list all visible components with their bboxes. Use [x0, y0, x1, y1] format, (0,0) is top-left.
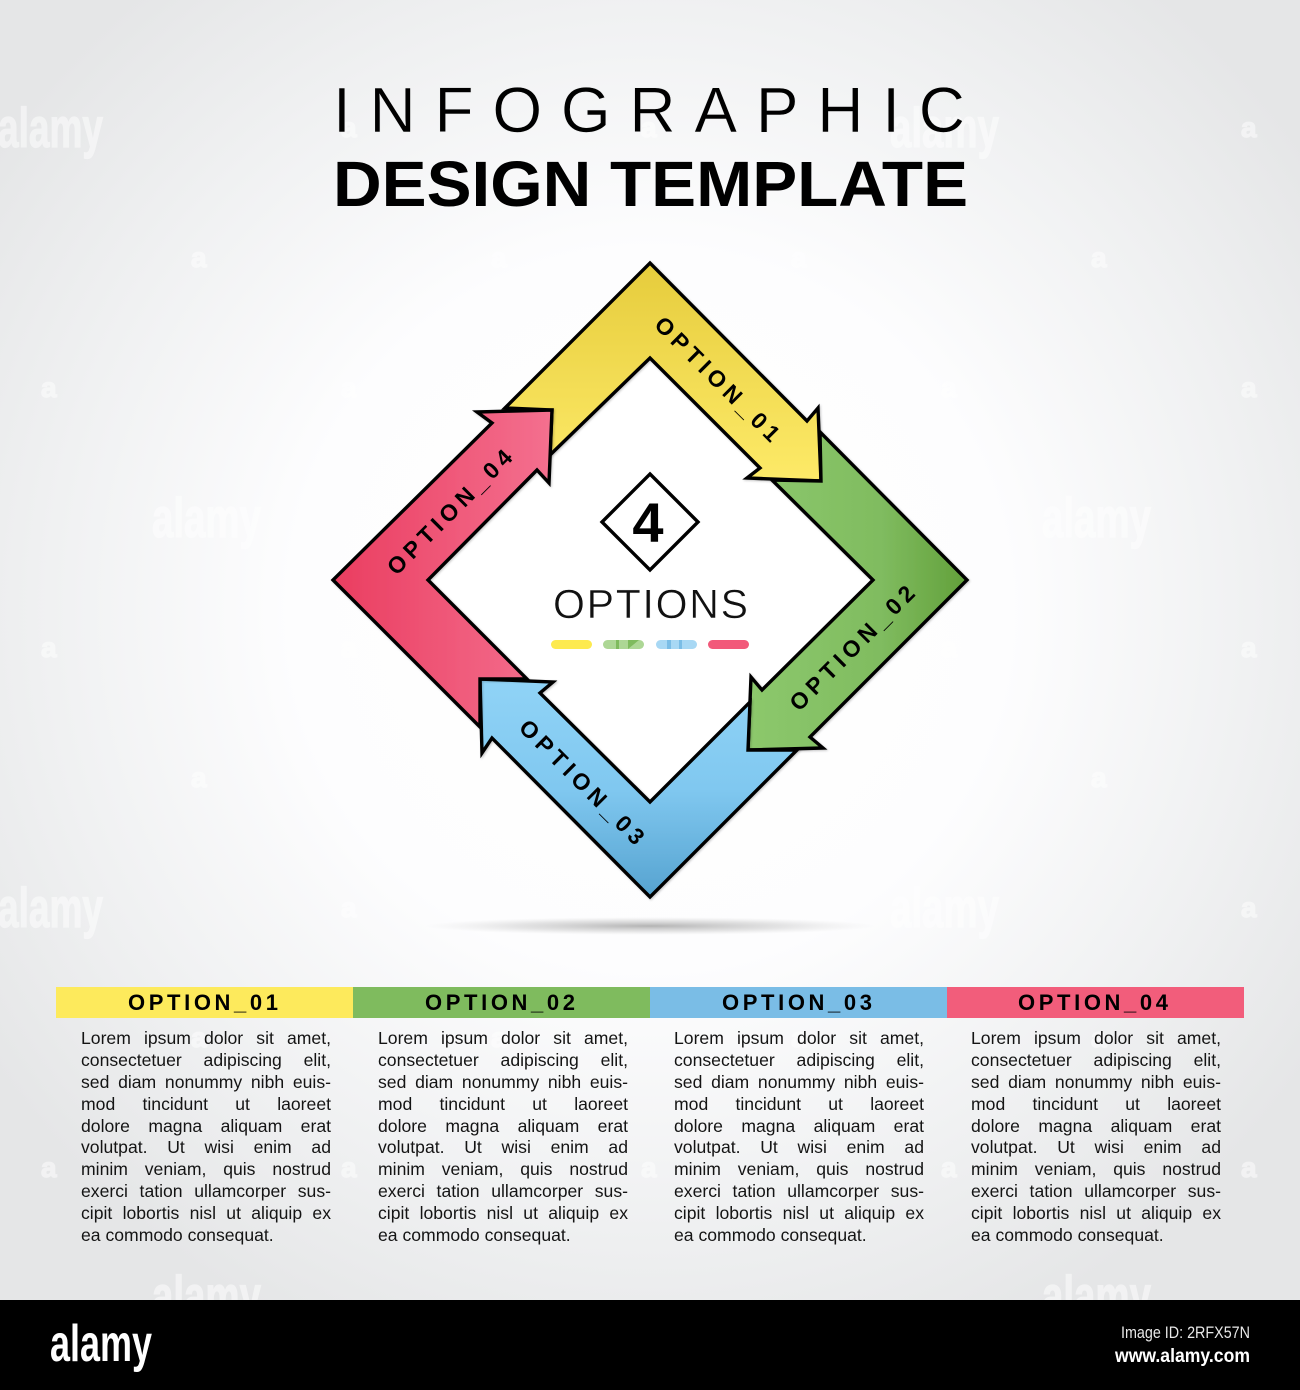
watermarks: a: [641, 112, 657, 143]
text block: option 04: dolore magna aliquam erat: [971, 1116, 1221, 1136]
footer logo: alamy: [50, 1315, 152, 1373]
centre badge: 4: 4: [632, 491, 664, 554]
watermarks: a: [1091, 762, 1107, 793]
text block: option 02: dolore magna aliquam erat: [378, 1116, 628, 1136]
text block: option 04: volutpat. Ut wisi enim ad: [971, 1137, 1221, 1157]
watermarks: a: [341, 112, 357, 143]
watermarks: a: [191, 1022, 207, 1053]
text block: option 01: consectetuer adipiscing elit,: [81, 1050, 331, 1070]
watermarks: alamy: [890, 96, 999, 159]
watermarks: a: [341, 1152, 357, 1183]
watermarks: a: [941, 632, 957, 663]
text block: option 02: [378, 1028, 628, 1245]
watermarks: alamy: [890, 876, 999, 939]
watermarks: a: [191, 242, 207, 273]
text block: option 04: cipit lobortis nisl ut aliquip ex: [971, 1203, 1221, 1223]
text block: option 02: volutpat. Ut wisi enim ad: [378, 1137, 628, 1157]
text block: option 03: Lorem ipsum dolor sit amet,: [674, 1028, 924, 1048]
text block: option 03: minim veniam, quis nostrud: [674, 1159, 924, 1179]
label: option 03: OPTION_03: [514, 714, 650, 850]
centre label: options: OPTIONS: [553, 581, 748, 627]
ground shadow: [425, 917, 875, 935]
header: option 03: [650, 987, 947, 1018]
text block: option 03: sed diam nonummy nibh euis-: [674, 1072, 924, 1092]
text block: option 01: sed diam nonummy nibh euis-: [81, 1072, 331, 1092]
text block: option 01: Lorem ipsum dolor sit amet,: [81, 1028, 331, 1048]
text block: option 01: [81, 1028, 331, 1245]
text block: option 04: exerci tation ullamcorper sus-: [971, 1181, 1221, 1201]
text block: option 03: cipit lobortis nisl ut aliquip ex: [674, 1203, 924, 1223]
arrow: option 04 pink: [333, 410, 552, 727]
text block: option 03: ea commodo consequat.: [674, 1225, 867, 1245]
header: option 02: OPTION_02: [425, 990, 575, 1015]
text block: option 03: exerci tation ullamcorper sus-: [674, 1181, 924, 1201]
text block: option 02: cipit lobortis nisl ut aliquip ex: [378, 1203, 628, 1223]
watermarks: a: [1241, 632, 1257, 663]
watermarks: alamy: [152, 486, 261, 549]
footer bar: [0, 1300, 1300, 1390]
text block: option 04: ea commodo consequat.: [971, 1225, 1164, 1245]
watermarks: a: [791, 762, 807, 793]
watermarks: a: [491, 1022, 507, 1053]
watermarks: alamy: [0, 876, 103, 939]
header: option 03: OPTION_03: [722, 990, 872, 1015]
text block: option 04: [971, 1028, 1221, 1245]
watermarks: alamy: [1042, 486, 1151, 549]
text block: option 03: volutpat. Ut wisi enim ad: [674, 1137, 924, 1157]
watermarks: a: [791, 242, 807, 273]
text block: option 02: sed diam nonummy nibh euis-: [378, 1072, 628, 1092]
text block: option 01: exerci tation ullamcorper sus-: [81, 1181, 331, 1201]
watermarks: a: [41, 632, 57, 663]
colour dashes: [551, 640, 749, 649]
watermarks: a: [191, 762, 207, 793]
text block: option 04: Lorem ipsum dolor sit amet,: [971, 1028, 1221, 1048]
header: option 02: [353, 987, 650, 1018]
arrow: option 02 green: [748, 432, 967, 750]
text block: option 02: minim veniam, quis nostrud: [378, 1159, 628, 1179]
label: option 02: OPTION_02: [784, 580, 920, 716]
watermarks: alamy: [0, 96, 103, 159]
watermarks: a: [41, 372, 57, 403]
footer image id: Image ID: 2RFX57N: [1121, 1323, 1250, 1342]
text block: option 01: minim veniam, quis nostrud: [81, 1159, 331, 1179]
title: DESIGN TEMPLATE: [333, 148, 968, 220]
text block: option 02: mod tincidunt ut laoreet: [378, 1094, 628, 1114]
text block: option 02: ea commodo consequat.: [378, 1225, 571, 1245]
title: [333, 74, 968, 220]
watermarks: a: [491, 762, 507, 793]
text block: option 04: minim veniam, quis nostrud: [971, 1159, 1221, 1179]
watermarks: a: [641, 1152, 657, 1183]
text block: option 03: dolore magna aliquam erat: [674, 1116, 924, 1136]
watermarks: a: [341, 372, 357, 403]
watermarks: a: [1241, 372, 1257, 403]
watermarks: a: [341, 892, 357, 923]
header: option 04: [947, 987, 1244, 1018]
text block: option 03: [674, 1028, 924, 1245]
header: option 01: [56, 987, 353, 1018]
watermarks: a: [941, 1152, 957, 1183]
text block: option 02: Lorem ipsum dolor sit amet,: [378, 1028, 628, 1048]
watermarks: a: [341, 632, 357, 663]
text block: option 01: ea commodo consequat.: [81, 1225, 274, 1245]
text block: option 01: volutpat. Ut wisi enim ad: [81, 1137, 331, 1157]
label: option 01: OPTION_01: [650, 311, 786, 447]
watermarks: a: [1091, 1022, 1107, 1053]
text block: option 02: consectetuer adipiscing elit,: [378, 1050, 628, 1070]
text block: option 04: consectetuer adipiscing elit,: [971, 1050, 1221, 1070]
watermarks: a: [1241, 112, 1257, 143]
watermarks: a: [491, 242, 507, 273]
title: INFOGRAPHIC: [333, 74, 965, 146]
text block: option 01: mod tincidunt ut laoreet: [81, 1094, 331, 1114]
text block: option 01: dolore magna aliquam erat: [81, 1116, 331, 1136]
watermarks: a: [1241, 1152, 1257, 1183]
footer url: www.alamy.com: [1114, 1346, 1250, 1367]
centre white panel: [428, 358, 873, 802]
text block: option 04: sed diam nonummy nibh euis-: [971, 1072, 1221, 1092]
label: option 04: OPTION_04: [382, 444, 518, 580]
arrow: option 03 blue: [480, 679, 797, 897]
text block: option 01: cipit lobortis nisl ut aliquip ex: [81, 1203, 331, 1223]
centre badge: 4: [602, 474, 698, 570]
text block: option 04: mod tincidunt ut laoreet: [971, 1094, 1221, 1114]
arrow: option 01 yellow: [505, 263, 821, 481]
watermarks: a: [791, 1022, 807, 1053]
watermarks: alamy: [1042, 1264, 1151, 1327]
header: option 04: OPTION_04: [1018, 990, 1169, 1015]
text block: option 03: consectetuer adipiscing elit,: [674, 1050, 924, 1070]
text block: option 03: mod tincidunt ut laoreet: [674, 1094, 924, 1114]
watermarks: a: [41, 1152, 57, 1183]
diamond diagram: [333, 263, 967, 897]
watermarks: a: [941, 372, 957, 403]
watermarks: a: [1241, 892, 1257, 923]
option header bars: [56, 987, 1244, 1018]
watermarks: alamy: [152, 1264, 261, 1327]
header: option 01: OPTION_01: [128, 990, 278, 1015]
watermarks: a: [1091, 242, 1107, 273]
text block: option 02: exerci tation ullamcorper sus-: [378, 1181, 628, 1201]
